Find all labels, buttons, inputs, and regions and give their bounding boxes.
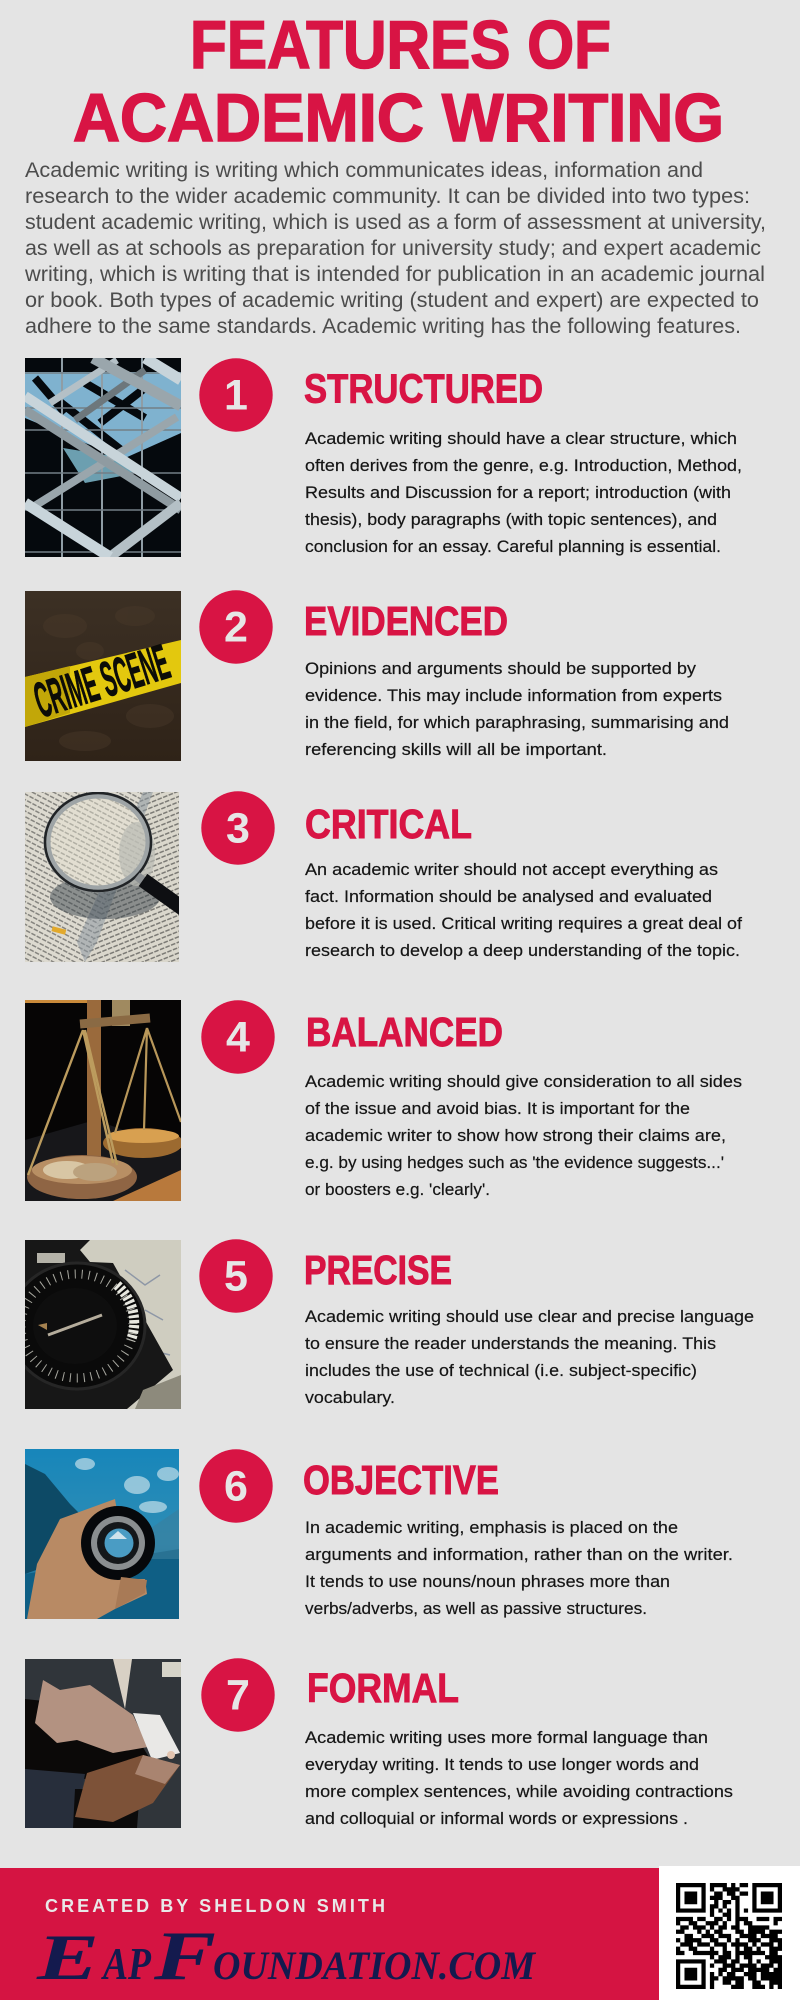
body text: in the field, for which paraphrasing, summarising and xyxy=(305,714,729,732)
heading: formal: FORMAL xyxy=(307,1665,459,1711)
body text xyxy=(305,1073,742,1199)
panel: feature 6 objective xyxy=(25,1449,733,1619)
body text: of the issue and avoid bias. It is important for the xyxy=(305,1100,690,1118)
number badge 2 xyxy=(199,590,273,664)
body text: Academic writing uses more formal language than xyxy=(305,1729,708,1747)
heading: evidenced: EVIDENCED xyxy=(304,598,508,644)
heading: balanced: BALANCED xyxy=(306,1009,503,1055)
body text: fact. Information should be analysed and evaluated xyxy=(305,888,712,906)
number badge 3: 3 xyxy=(226,804,250,852)
panel: feature 2 evidenced xyxy=(25,590,729,761)
body text xyxy=(305,660,729,759)
QR code panel xyxy=(659,1866,800,2000)
body text: referencing skills will all be important. xyxy=(305,741,607,759)
credit line: CREATED BY SHELDON SMITH xyxy=(45,1896,385,1916)
number badge 4 xyxy=(201,1000,275,1074)
photo: magnifying glass on a book xyxy=(25,792,179,962)
intro paragraph: research to the wider academic community. It can be divided into two types: xyxy=(25,184,750,208)
website logotype: OUNDATION.COM xyxy=(213,1943,536,1988)
website logotype: AP xyxy=(101,1938,152,1989)
heading: structured: STRUCTURED xyxy=(304,366,543,412)
heading: critical: CRITICAL xyxy=(305,801,472,847)
number badge 6 xyxy=(199,1449,273,1523)
photo: brass scales xyxy=(25,1000,181,1201)
website logotype xyxy=(36,1918,536,1995)
body text: everyday writing. It tends to use longer words and xyxy=(305,1756,699,1774)
number badge 1 xyxy=(199,358,273,432)
website logotype: F xyxy=(153,1918,216,1995)
body text: In academic writing, emphasis is placed on the xyxy=(305,1519,678,1537)
body text: Academic writing should use clear and precise language xyxy=(305,1308,754,1326)
panel: feature 1 structured xyxy=(25,358,742,557)
body text: academic writer to show how strong their claims are, xyxy=(305,1127,726,1145)
body text xyxy=(305,1308,754,1407)
panel: feature 4 balanced xyxy=(25,1000,742,1201)
body text xyxy=(305,861,743,960)
panel: feature 7 formal xyxy=(25,1658,733,1828)
body text: Academic writing should have a clear structure, which xyxy=(305,430,737,448)
photo: hand holding a lens xyxy=(25,1449,179,1619)
number badge 7: 7 xyxy=(226,1672,250,1720)
body text: Results and Discussion for a report; introduction (with xyxy=(305,484,731,502)
body text: often derives from the genre, e.g. Introduction, Method, xyxy=(305,457,742,475)
body text: evidence. This may include information from experts xyxy=(305,687,722,705)
intro paragraph: adhere to the same standards. Academic writing has the following features. xyxy=(25,314,741,338)
number badge 5 xyxy=(199,1239,273,1313)
body text: before it is used. Critical writing requires a great deal of xyxy=(305,915,743,933)
body text: thesis), body paragraphs (with topic sentences), and xyxy=(305,511,717,529)
intro paragraph: Academic writing is writing which communicates ideas, information and xyxy=(25,158,703,182)
number badge 2: 2 xyxy=(224,604,248,652)
panel: feature 5 precise xyxy=(9,1239,754,1409)
body text: Opinions and arguments should be supported by xyxy=(305,660,697,678)
title: ACADEMIC WRITING xyxy=(73,80,724,156)
body text: or boosters e.g. 'clearly'. xyxy=(305,1181,490,1199)
body text xyxy=(305,1729,733,1828)
body text: vocabulary. xyxy=(305,1389,395,1407)
website logotype: E xyxy=(36,1922,99,1994)
body text: It tends to use nouns/noun phrases more than xyxy=(305,1573,670,1591)
photo: compass on a map xyxy=(25,1240,181,1409)
title: FEATURES OF xyxy=(190,7,611,83)
number badge 1: 1 xyxy=(224,372,248,420)
heading: objective: OBJECTIVE xyxy=(303,1457,499,1503)
body text: Academic writing should give consideration to all sides xyxy=(305,1073,742,1091)
number badge 7 xyxy=(201,1658,275,1732)
body text: arguments and information, rather than on the writer. xyxy=(305,1546,733,1564)
intro paragraph: student academic writing, which is used as a form of assessment at university, xyxy=(25,210,766,234)
body text: more complex sentences, while avoiding contractions xyxy=(305,1783,733,1801)
intro paragraph: writing, which is writing that is intended for publication in an academic journal xyxy=(24,262,765,286)
intro paragraph: or book. Both types of academic writing (student and expert) are expected to xyxy=(25,288,759,312)
body text: An academic writer should not accept everything as xyxy=(305,861,718,879)
number badge 5: 5 xyxy=(224,1252,248,1300)
footer band xyxy=(0,1868,659,2000)
photo: steel beams and glass facade xyxy=(25,358,181,557)
intro paragraph xyxy=(24,158,766,338)
heading: precise: PRECISE xyxy=(304,1247,452,1293)
number badge 3 xyxy=(201,791,275,865)
number badge 4: 4 xyxy=(226,1014,250,1062)
panel: feature 3 critical xyxy=(25,791,743,962)
number badge 6: 6 xyxy=(224,1462,248,1510)
body text xyxy=(305,430,742,556)
body text: verbs/adverbs, as well as passive structures. xyxy=(305,1600,647,1618)
body text: includes the use of technical (i.e. subject-specific) xyxy=(305,1362,697,1380)
photo: hands adjusting a cufflink xyxy=(25,1659,181,1828)
title xyxy=(73,7,724,156)
intro paragraph: as well as at schools as preparation for university study; and expert academic xyxy=(25,236,761,260)
body text xyxy=(305,1519,733,1618)
body text: and colloquial or informal words or expressions . xyxy=(305,1810,688,1828)
body text: conclusion for an essay. Careful planning is essential. xyxy=(305,538,721,556)
body text: research to develop a deep understanding of the topic. xyxy=(305,942,740,960)
body text: e.g. by using hedges such as 'the evidence suggests...' xyxy=(305,1154,724,1172)
body text: to ensure the reader understands the meaning. This xyxy=(305,1335,716,1353)
